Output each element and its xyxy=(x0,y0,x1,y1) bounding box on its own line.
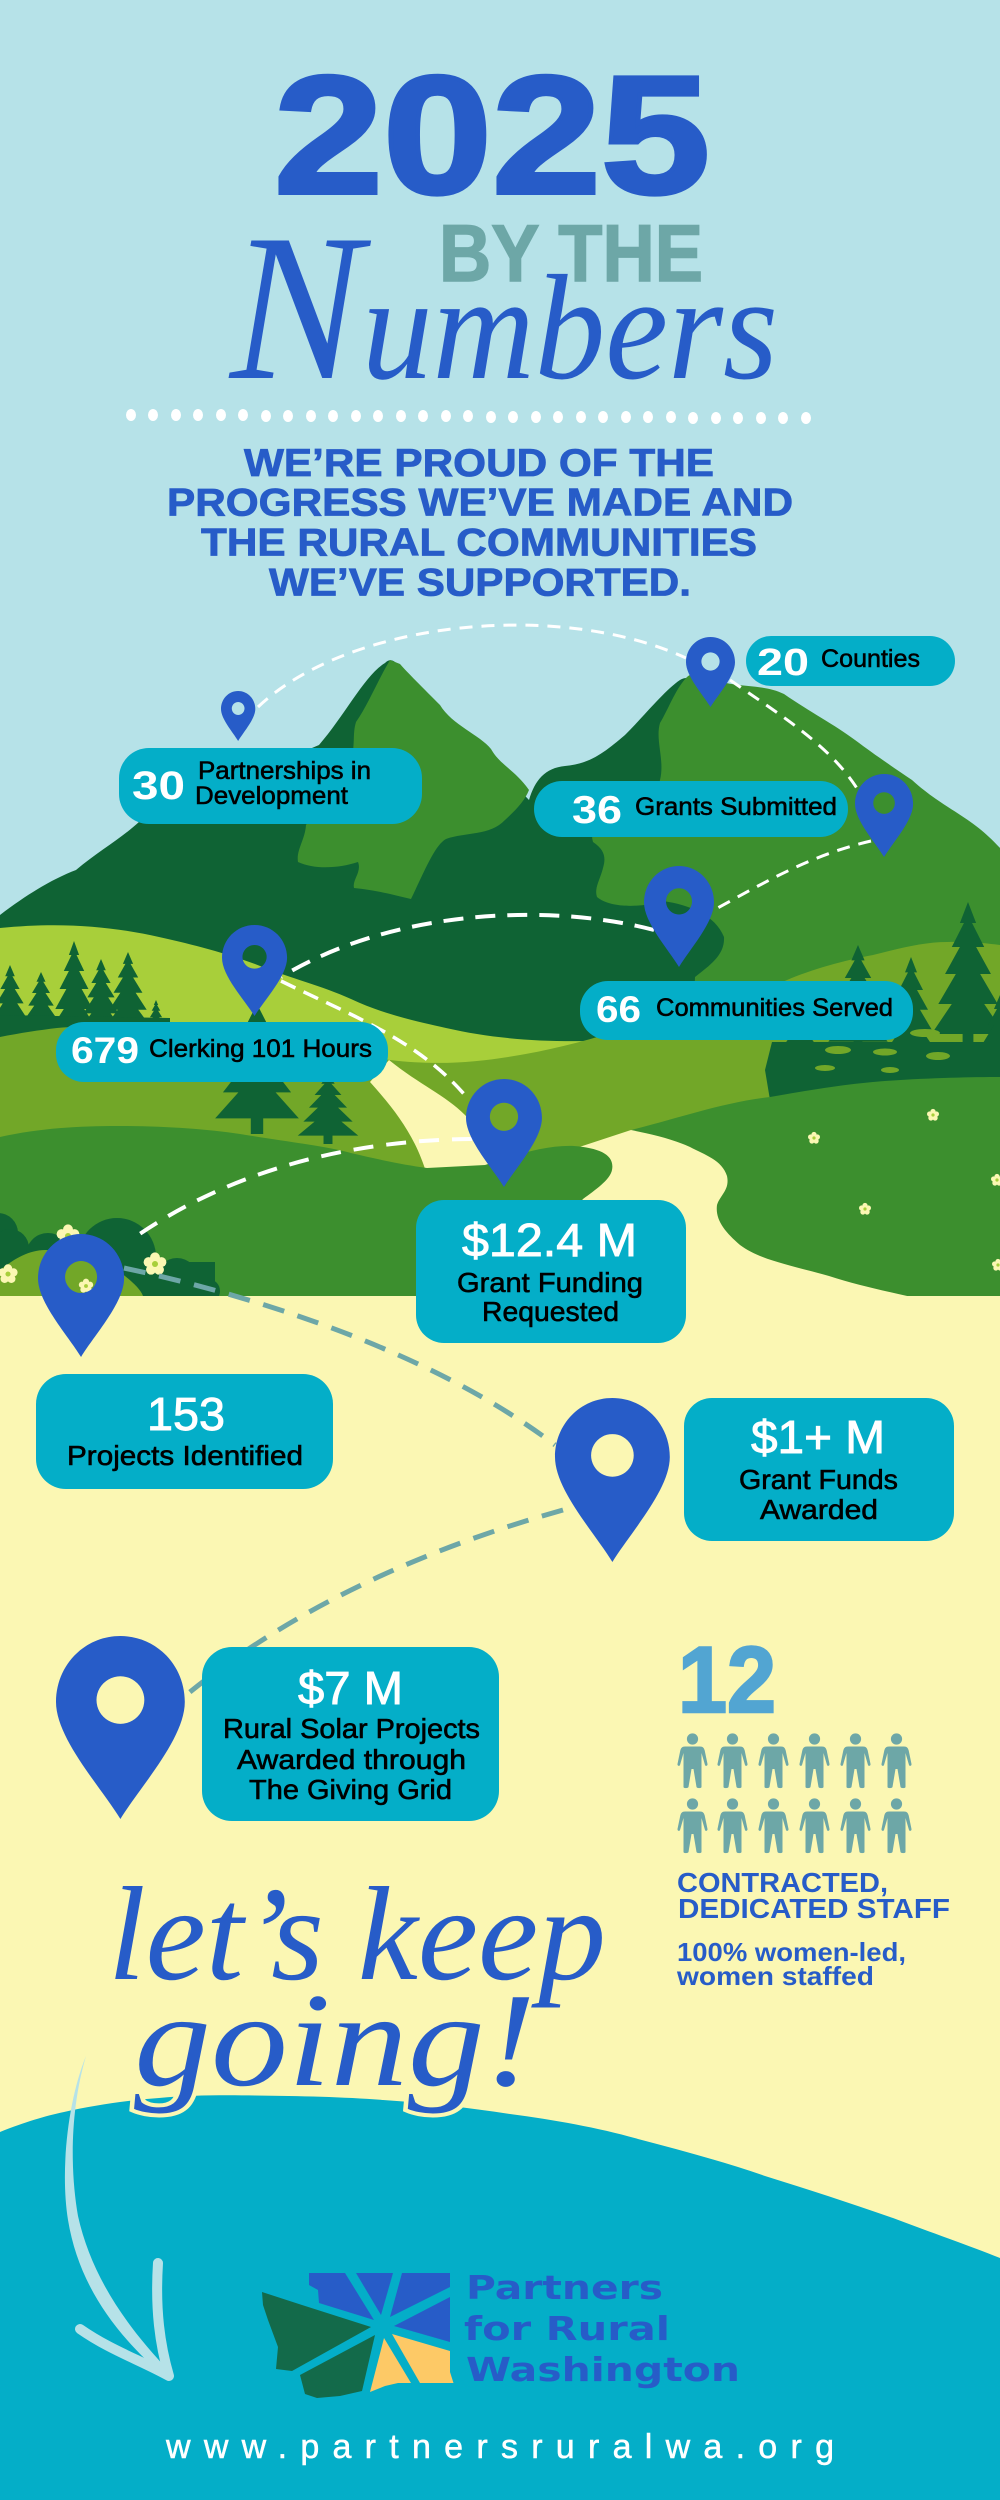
badge: 12.4 M xyxy=(416,1200,686,1343)
pin: grant funding requested xyxy=(466,1079,542,1187)
pin: solar projects xyxy=(56,1636,185,1819)
pin: projects identified xyxy=(38,1234,124,1357)
closing script: let's keep going: let’s keep xyxy=(108,1860,606,2008)
closing script: let's keep going: going! xyxy=(134,1966,536,2114)
sky background xyxy=(0,0,1000,1300)
route: white dashed lines xyxy=(131,625,871,1240)
intro text xyxy=(167,442,793,604)
badge: 1+ M: Grant Funds xyxy=(739,1464,898,1495)
badge: 679 clerking: Clerking 101 Hours xyxy=(149,1035,372,1063)
front hill right xyxy=(631,1077,1000,1300)
badge: 36 grants: Grants Submitted xyxy=(635,793,837,821)
mountains dark silhouette xyxy=(0,660,1000,1110)
badge: 30 partnerships: Development xyxy=(195,782,348,810)
cream ground xyxy=(0,1296,1000,2500)
badge: 7 M solar xyxy=(202,1647,499,1821)
lower road xyxy=(480,1100,1000,1300)
mountain light face left xyxy=(298,660,529,899)
badge: 36 grants xyxy=(534,781,848,837)
logo wordmark: Partners xyxy=(466,2268,663,2307)
heading: by the: BY THE xyxy=(439,209,703,299)
pin: grants submitted xyxy=(855,774,913,857)
logo mark xyxy=(262,2273,454,2398)
number 12: 12 xyxy=(678,1627,776,1732)
staff stat xyxy=(676,1627,950,1991)
teal hill footer xyxy=(0,2095,1000,2500)
badge: 36 grants: 36 xyxy=(572,789,622,832)
pin: counties xyxy=(686,637,735,707)
flowers xyxy=(0,1109,1000,1293)
badge: 12.4 M: $12.4 M xyxy=(462,1214,637,1266)
badge: 30 partnerships: 30 xyxy=(132,764,185,808)
badge: 153 projects: 153 xyxy=(147,1388,225,1440)
staff caption xyxy=(676,1867,950,1991)
badge: 20 counties: Counties xyxy=(821,645,920,673)
logo wordmark xyxy=(464,2268,740,2389)
badge: 66 communities: Communities Served xyxy=(656,994,893,1022)
website url: www.partnersruralwa.org xyxy=(165,2428,834,2466)
logo wordmark: for Rural xyxy=(464,2309,670,2348)
right tree cluster xyxy=(765,902,1000,1100)
arrow xyxy=(65,2056,170,2378)
staff caption: 100% women-led, xyxy=(677,1937,906,1967)
intro text: PROGRESS WE’VE MADE AND xyxy=(167,482,793,524)
staff caption: DEDICATED STAFF xyxy=(678,1893,950,1924)
upper road xyxy=(370,1060,520,1175)
forest trees xyxy=(765,902,1000,1100)
mountain light face right xyxy=(592,673,1000,1100)
title: 2025: 2025 xyxy=(274,41,710,229)
forest highlights xyxy=(815,1029,950,1073)
heading: numbers script: Numbers xyxy=(228,192,778,424)
bushes xyxy=(0,1213,220,1303)
route: teal dashed lines xyxy=(124,1268,563,1696)
badge: 12.4 M: Grant Funding xyxy=(457,1267,643,1298)
badge: 7 M solar: The Giving Grid xyxy=(249,1774,452,1805)
badge: 30 partnerships xyxy=(119,748,422,824)
front hill left xyxy=(0,1126,612,1300)
pin: grant funds awarded xyxy=(555,1398,670,1562)
badge: 1+ M: $1+ M xyxy=(751,1411,885,1463)
pin: communities xyxy=(644,866,714,967)
badge: 7 M solar: Rural Solar Projects xyxy=(223,1713,480,1744)
lime hill xyxy=(0,925,590,1080)
badge: 30 partnerships: Partnerships in xyxy=(198,757,371,785)
badge: 679 clerking: 679 xyxy=(71,1030,139,1071)
badge: 12.4 M: Requested xyxy=(482,1296,619,1327)
badge: 66 communities xyxy=(580,981,913,1040)
pin: clerking xyxy=(222,925,287,1016)
badge: 153 projects: Projects Identified xyxy=(67,1440,303,1471)
landscape illustration xyxy=(0,660,1000,1303)
centre trees xyxy=(215,1004,358,1144)
staff caption: CONTRACTED, xyxy=(677,1867,888,1898)
logo xyxy=(262,2268,740,2398)
dotted divider xyxy=(126,409,811,424)
intro text: WE’VE SUPPORTED. xyxy=(269,562,691,604)
badge: 153 projects xyxy=(36,1374,333,1489)
intro text: THE RURAL COMMUNITIES xyxy=(201,522,757,564)
logo wordmark: Washington xyxy=(466,2350,740,2389)
badge: 679 clerking xyxy=(56,1022,388,1082)
staff caption: women staffed xyxy=(676,1961,874,1991)
badge: 1+ M: Awarded xyxy=(760,1494,878,1525)
badge: 1+ M xyxy=(684,1398,954,1541)
pin: partnerships xyxy=(221,691,255,741)
badge: 66 communities: 66 xyxy=(596,989,641,1030)
badge: 20 counties xyxy=(746,636,955,686)
closing script: let's keep going xyxy=(108,1860,606,2114)
badge: 7 M solar: Awarded through xyxy=(237,1744,466,1775)
badge: 7 M solar: $7 M xyxy=(298,1662,403,1714)
left tree line xyxy=(0,941,170,1045)
olive hill xyxy=(0,942,1000,1300)
intro text: WE’RE PROUD OF THE xyxy=(244,442,714,485)
people icons xyxy=(677,1733,912,1853)
badge: 20 counties: 20 xyxy=(757,642,809,684)
